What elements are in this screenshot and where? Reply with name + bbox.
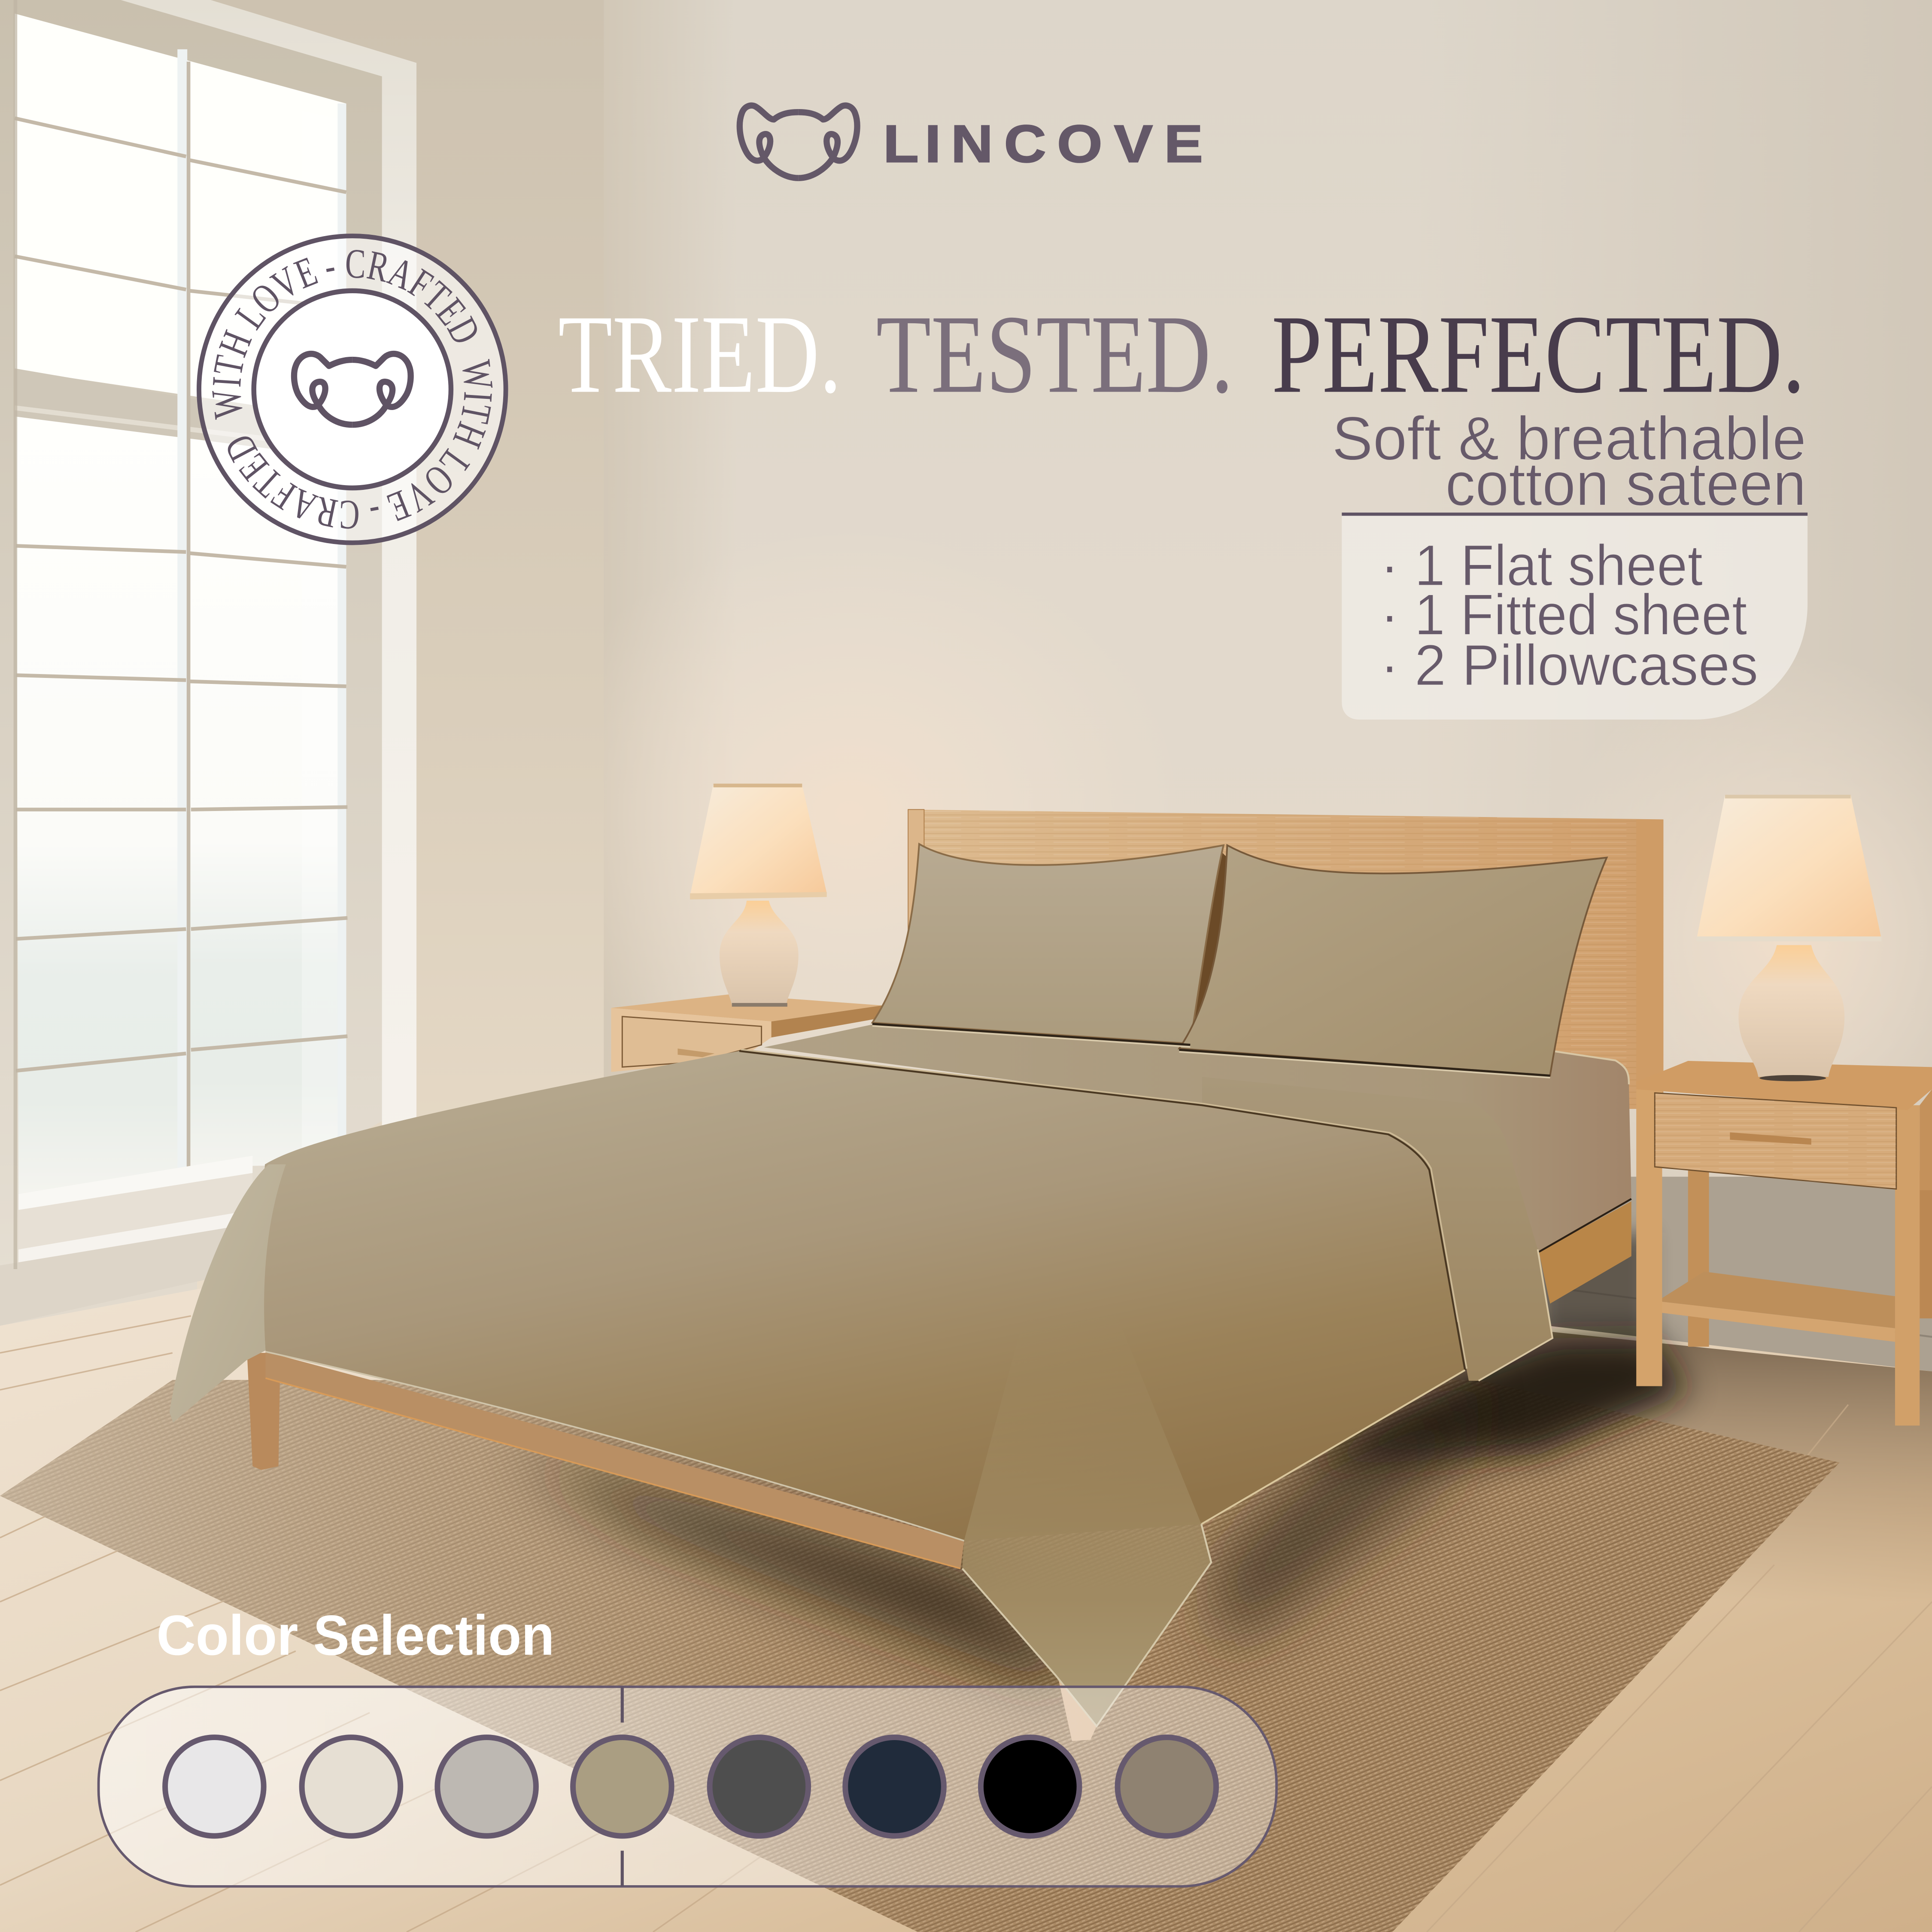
nightstand back leg — [1688, 1170, 1709, 1347]
swatch: khaki — [573, 1738, 671, 1836]
sheet right flap — [1202, 1077, 1552, 1381]
pillow gap shadow — [1190, 850, 1232, 1041]
bed leg front — [1052, 1651, 1097, 1741]
list item: flat sheet: · — [1380, 533, 1399, 598]
list item: pillowcases: 2 Pillowcases — [1415, 633, 1758, 698]
window — [0, 0, 416, 1326]
nightstand top — [1636, 1061, 1932, 1110]
floor — [0, 1214, 1932, 1932]
fitted sheet — [764, 1023, 1631, 1303]
sheet front drape — [962, 1284, 1211, 1726]
bed frame — [247, 1352, 1097, 1741]
swatch: taupe — [1118, 1738, 1216, 1836]
swatch: light grey — [437, 1738, 536, 1836]
badge centre — [254, 291, 451, 488]
logo icon — [740, 106, 857, 178]
list item: pillowcases: · — [1380, 633, 1399, 698]
right nightstand — [1636, 1061, 1932, 1425]
swatch: charcoal — [710, 1738, 808, 1836]
color selection heading: Color Selection — [156, 1603, 554, 1667]
headline word: perfected: PERFECTED. — [1272, 292, 1805, 416]
contents card — [1342, 513, 1807, 720]
bed leg left — [247, 1353, 280, 1470]
nightstand handle — [677, 1048, 715, 1057]
window sill — [18, 1156, 252, 1210]
subheading — [1332, 404, 1806, 519]
badge ring — [199, 236, 506, 543]
logo wordmark: LINCOVE — [883, 115, 1203, 173]
shadow under bed — [517, 1337, 1688, 1688]
nightstand shelf — [1657, 1272, 1895, 1328]
sheet fold line — [741, 1050, 1467, 1369]
headline — [558, 292, 1805, 416]
nightstand drawer — [1655, 1093, 1896, 1189]
sheet lower edge — [1201, 1370, 1465, 1524]
subheading line two: cotton sateen — [1445, 450, 1806, 519]
lamp vase — [1738, 945, 1844, 1077]
swatch: white — [165, 1738, 264, 1836]
swatch: ivory — [302, 1738, 401, 1836]
nightstand handle — [1730, 1132, 1811, 1145]
left nightstand — [611, 994, 882, 1072]
left lamp — [690, 784, 827, 1007]
right lamp — [1697, 795, 1881, 1081]
sheet left drape — [170, 1164, 286, 1422]
window white trim — [121, 0, 416, 1232]
back wall — [517, 0, 1932, 1392]
badge — [199, 236, 506, 543]
bed side rail right — [1539, 1201, 1631, 1303]
headboard — [908, 810, 1663, 1109]
lamp shade — [1697, 795, 1881, 939]
color selection panel — [99, 1687, 1276, 1886]
nightstand front — [611, 1008, 772, 1072]
list item: fitted sheet: 1 Fitted sheet — [1415, 582, 1747, 647]
swatch: navy — [845, 1738, 944, 1836]
headline word: tested: TESTED. — [876, 292, 1233, 416]
headline word: tried: TRIED. — [558, 292, 841, 416]
left pillow — [872, 844, 1224, 1044]
nightstand side panel — [1920, 1089, 1932, 1190]
window glazing bars — [15, 118, 347, 1071]
window upper sash glass — [15, 14, 346, 419]
window meeting rail — [15, 368, 346, 459]
side wall — [197, 0, 604, 1294]
subheading line one: Soft & breathable — [1332, 404, 1806, 473]
floor plank lines — [0, 1316, 1932, 1932]
flat sheet — [170, 1050, 1552, 1726]
bed side rail — [265, 1352, 964, 1568]
sheet top surface — [262, 1051, 1465, 1541]
badge icon — [294, 354, 411, 425]
badge circular text repeat: WITH LOVE - CRAFTED — [216, 358, 502, 538]
list item: flat sheet: 1 Flat sheet — [1415, 533, 1703, 598]
brand logo — [740, 106, 1203, 178]
lamp shade — [690, 784, 827, 896]
pillow base lines — [872, 1024, 1550, 1078]
window frame — [0, 0, 416, 1326]
swatch: black — [981, 1738, 1079, 1836]
nightstand front legs — [1636, 1084, 1662, 1386]
list item: fitted sheet: · — [1380, 582, 1399, 647]
right pillow — [1179, 845, 1607, 1075]
headboard right post — [1636, 819, 1663, 1084]
lamp vase — [720, 901, 799, 1005]
headboard left post — [908, 810, 924, 973]
badge circular text: WITH LOVE - CRAFTED — [203, 240, 489, 421]
window lower sash glass — [16, 416, 346, 1194]
rug — [0, 1380, 1840, 1932]
nightstand top — [611, 994, 882, 1021]
